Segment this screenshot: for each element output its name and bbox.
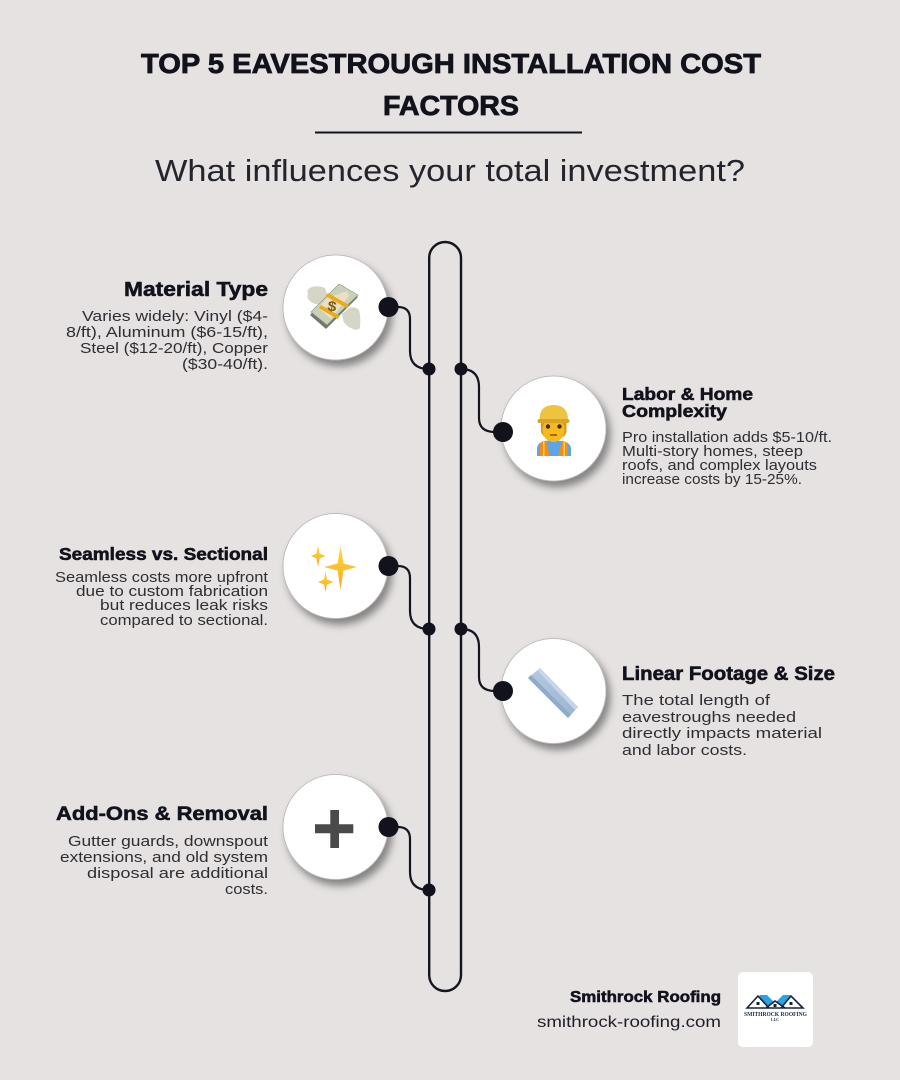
title: FACTORS xyxy=(383,90,519,121)
text: labor and home complexity: Multi-story homes, steep xyxy=(622,443,803,460)
footer brand: Smithrock Roofing xyxy=(570,989,721,1006)
title: TOP 5 EAVESTROUGH INSTALLATION COST xyxy=(141,48,761,79)
panel: labor and home complexity xyxy=(454,362,832,488)
text: seamless vs sectional xyxy=(55,569,269,629)
text: material type: Varies widely: Vinyl ($4- xyxy=(82,308,268,325)
icon: plus xyxy=(283,774,388,880)
text: add-ons and removal: disposal are additional xyxy=(87,865,268,882)
text: seamless vs sectional: Seamless costs more upfront xyxy=(55,569,269,586)
text: linear footage and size: The total length of xyxy=(622,692,771,709)
text: linear footage and size: eavestroughs needed xyxy=(622,709,796,726)
timeline spine xyxy=(429,242,461,991)
text: seamless vs sectional: but reduces leak risks xyxy=(100,597,268,614)
text: material type: Steel ($12-20/ft), Copper xyxy=(80,340,268,357)
logo: LLC xyxy=(771,1017,779,1022)
icon: flying money: $ xyxy=(326,297,338,315)
text: linear footage and size: directly impacts material xyxy=(622,725,822,742)
text: add-ons and removal: costs. xyxy=(225,881,268,898)
heading: labor and home complexity xyxy=(622,384,753,421)
footer brand xyxy=(537,989,721,1031)
text: material type: ($30-40/ft). xyxy=(182,356,268,373)
text: labor and home complexity: roofs, and complex layouts xyxy=(622,457,817,474)
text: add-ons and removal: extensions, and old system xyxy=(60,849,268,866)
heading: seamless vs sectional: Seamless vs. Sectional xyxy=(59,544,268,564)
icon: sparkles xyxy=(283,514,388,618)
panel: linear footage and size xyxy=(454,622,835,759)
text: seamless vs sectional: compared to sectional. xyxy=(100,612,268,629)
panel: add-ons and removal xyxy=(56,774,436,898)
connector: material type xyxy=(378,297,436,376)
text: seamless vs sectional: due to custom fabrication xyxy=(76,583,268,600)
heading: add-ons and removal: Add-Ons & Removal xyxy=(56,804,268,825)
text: material type xyxy=(66,308,268,373)
icon: construction worker xyxy=(501,376,606,481)
text: labor and home complexity xyxy=(622,429,832,488)
heading: labor and home complexity: Complexity xyxy=(622,401,727,421)
icon: flying money xyxy=(283,255,388,360)
heading: labor and home complexity: Labor & Home xyxy=(622,384,753,404)
connector: linear footage and size xyxy=(454,622,513,701)
text: material type: 8/ft), Aluminum ($6-15/ft), xyxy=(66,324,268,341)
text: labor and home complexity: Pro installation adds $5-10/ft. xyxy=(622,429,832,446)
footer brand: smithrock-roofing.com xyxy=(537,1014,721,1031)
icon: ruler xyxy=(501,638,606,744)
text: linear footage and size xyxy=(622,692,822,759)
connector: add-ons and removal xyxy=(378,817,436,896)
panel: material type xyxy=(66,255,436,376)
heading: linear footage and size: Linear Footage & Size xyxy=(622,664,835,685)
panel: seamless vs sectional xyxy=(55,514,436,636)
logo: SMITHROCK ROOFING xyxy=(744,1012,807,1018)
logo xyxy=(738,972,813,1047)
text: add-ons and removal: Gutter guards, downspout xyxy=(68,833,269,850)
connector: seamless vs sectional xyxy=(378,556,436,636)
text: add-ons and removal xyxy=(60,833,269,898)
text: labor and home complexity: increase costs by 15-25%. xyxy=(622,471,802,488)
text: linear footage and size: and labor costs. xyxy=(622,742,747,759)
title xyxy=(141,48,761,121)
subtitle: What influences your total investment? xyxy=(155,153,745,188)
connector: labor and home complexity xyxy=(454,362,513,442)
heading: material type: Material Type xyxy=(124,279,268,301)
